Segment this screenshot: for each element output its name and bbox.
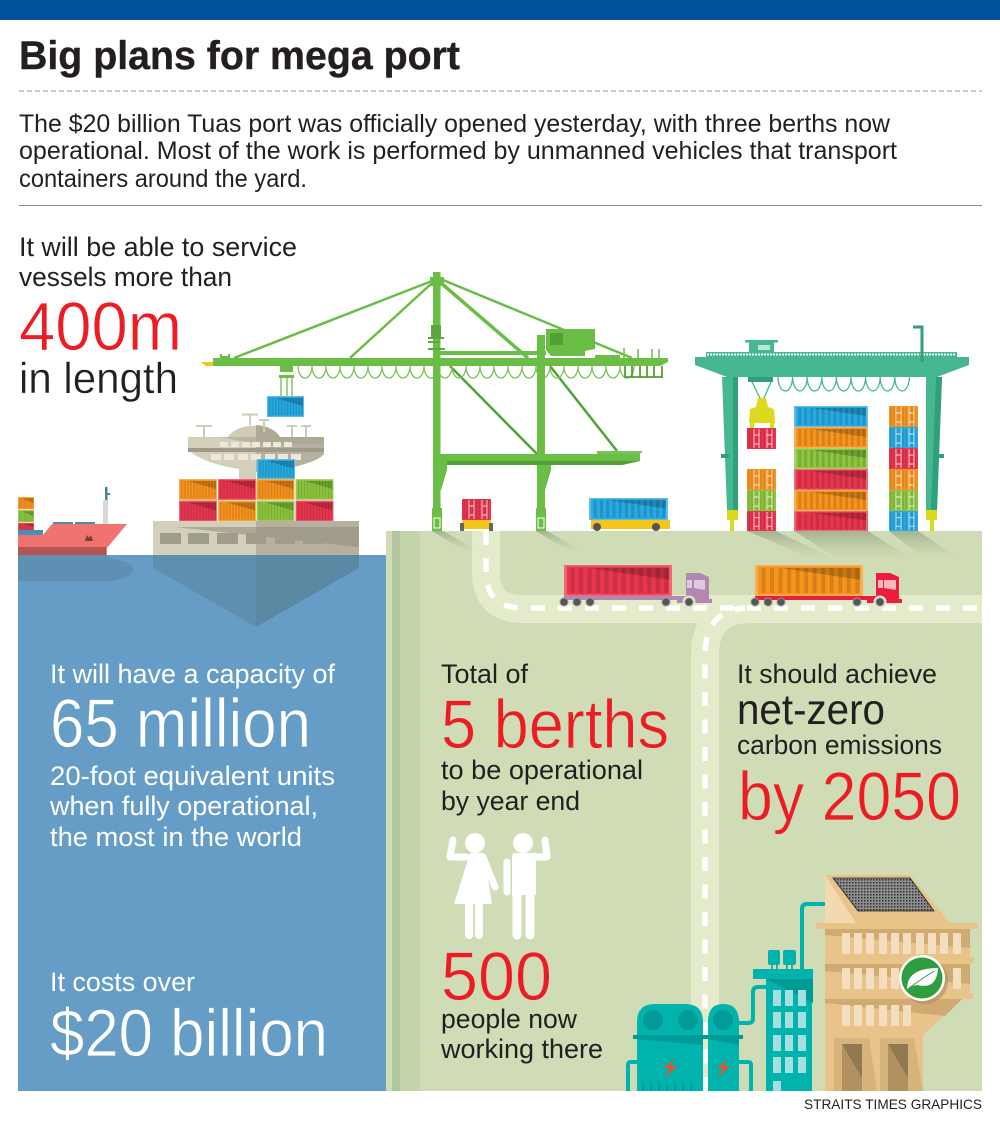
text: net-zero	[737, 659, 961, 835]
text: capacity	[49, 659, 335, 852]
text: net-zero: net-zero	[737, 686, 885, 734]
small red ship	[18, 487, 133, 581]
text: cost: It costs over	[50, 967, 195, 997]
text: workers	[440, 938, 603, 1064]
green building with solar roof	[816, 875, 978, 1091]
text: berths: by year end	[441, 786, 580, 816]
text: cost: $20 billion	[50, 996, 328, 1071]
text: workers: working there	[440, 1034, 603, 1064]
title: Big plans for mega port	[19, 34, 460, 78]
panel: water	[18, 555, 386, 1091]
panel: land	[386, 531, 982, 1091]
icon: green leaf badge	[899, 955, 948, 1004]
text: berths: 5 berths	[441, 686, 669, 763]
text: capacity: 20-foot equivalent units	[50, 761, 335, 791]
text: 400m vessel length: It will be able to service	[19, 232, 297, 262]
text: workers: 500	[441, 938, 552, 1015]
text: berths: to be operational	[441, 755, 643, 785]
text: capacity: the most in the world	[50, 822, 302, 852]
text: 400m vessel length: 400m	[19, 288, 182, 365]
container stacks under gantry	[747, 406, 918, 531]
text: cost	[50, 967, 328, 1071]
intro text: The $20 billion Tuas port was officially opened yesterday, with three berths now	[19, 110, 891, 138]
green energy tanks	[628, 1004, 751, 1091]
text: net-zero: It should achieve	[737, 659, 937, 689]
intro text	[19, 110, 897, 193]
text: berths	[441, 659, 669, 816]
green energy tower	[739, 904, 825, 1091]
hanging blue container	[267, 396, 304, 417]
text: capacity: when fully operational,	[49, 791, 318, 821]
text: 400m vessel length: in length	[19, 354, 178, 403]
text: workers: people now	[441, 1004, 577, 1034]
text: capacity: It will have a capacity of	[50, 659, 335, 689]
text: net-zero: by 2050	[738, 758, 961, 835]
yellow vehicle with blue container	[589, 498, 670, 531]
teal gantry crane	[695, 327, 969, 531]
top blue band	[0, 0, 1000, 20]
intro text: operational. Most of the work is performed by unmanned vehicles that transport	[19, 137, 897, 165]
icon: people	[450, 833, 547, 935]
green ship-to-shore crane	[201, 272, 668, 531]
text: capacity: 65 million	[50, 685, 311, 762]
credit: STRAITS TIMES GRAPHICS	[804, 1096, 982, 1112]
yellow vehicle with red container	[460, 499, 493, 531]
intro text: containers around the yard.	[19, 165, 307, 193]
text: 400m vessel length	[19, 232, 297, 403]
large container ship	[153, 414, 359, 627]
truck: orange container, red cab	[751, 565, 902, 608]
truck: red container, purple cab	[560, 565, 712, 608]
text: 400m vessel length: vessels more than	[19, 262, 232, 292]
text: berths: Total of	[441, 659, 528, 689]
text: net-zero: carbon emissions	[737, 730, 942, 760]
